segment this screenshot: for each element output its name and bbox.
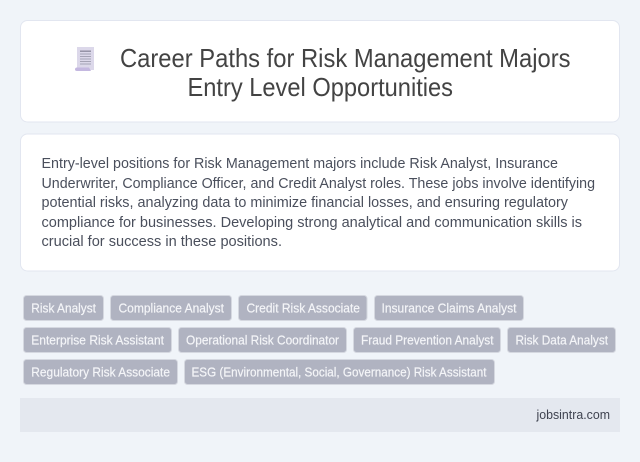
tag: Risk Data Analyst	[508, 328, 616, 352]
tag: Credit Risk Associate: Credit Risk Associate	[246, 300, 360, 316]
tag: Compliance Analyst: Compliance Analyst	[118, 300, 224, 316]
tag: Enterprise Risk Assistant: Enterprise Risk Assistant	[31, 332, 164, 348]
tag: ESG Risk Assistant	[184, 360, 494, 384]
panel: header	[20, 20, 620, 122]
tag: Insurance Claims Analyst: Insurance Claims Analyst	[382, 300, 517, 316]
tag: Operational Risk Coordinator: Operational Risk Coordinator	[186, 332, 340, 348]
tag: Risk Analyst: Risk Analyst	[31, 300, 96, 316]
tag: Credit Risk Associate	[238, 296, 367, 320]
tag: Regulatory Risk Associate	[24, 360, 178, 384]
tag: Insurance Claims Analyst	[374, 296, 524, 320]
tag: Regulatory Risk Associate: Regulatory Risk Associate	[31, 364, 170, 380]
title: Entry Level Opportunities	[188, 72, 453, 102]
tag: ESG Risk Assistant: ESG (Environmental, Social, Governance) Risk Assistant	[192, 364, 487, 380]
icon: document scroll	[75, 47, 94, 71]
text block: description: Entry-level positions for Risk Management majors include Risk Analyst, Insurance	[42, 155, 558, 172]
footer	[20, 398, 620, 432]
tag: Enterprise Risk Assistant	[24, 328, 172, 352]
panel: description	[20, 134, 620, 271]
tag: Compliance Analyst	[110, 296, 232, 320]
text block: description: compliance for businesses. Developing strong analytical and communication skills is	[42, 214, 582, 231]
tag: Fraud Prevention Analyst	[354, 328, 500, 352]
text block: description: Underwriter, Compliance Officer, and Credit Analyst roles. These jobs involve identifying	[42, 175, 595, 192]
tag: Risk Data Analyst: Risk Data Analyst	[516, 332, 608, 348]
text block: description: crucial for success in these positions.	[42, 233, 282, 250]
tag: Operational Risk Coordinator	[178, 328, 346, 352]
tag: Fraud Prevention Analyst: Fraud Prevention Analyst	[361, 332, 494, 348]
title	[120, 43, 570, 102]
footer: site name: jobsintra.com	[536, 407, 610, 422]
text block: description: potential risks, analyzing data to minimize financial losses, and ensuring regulatory	[42, 194, 568, 211]
text block: description	[42, 155, 595, 250]
tags: career roles	[24, 296, 616, 384]
tag: Risk Analyst	[24, 296, 104, 320]
title: Career Paths for Risk Management Majors	[120, 43, 570, 73]
